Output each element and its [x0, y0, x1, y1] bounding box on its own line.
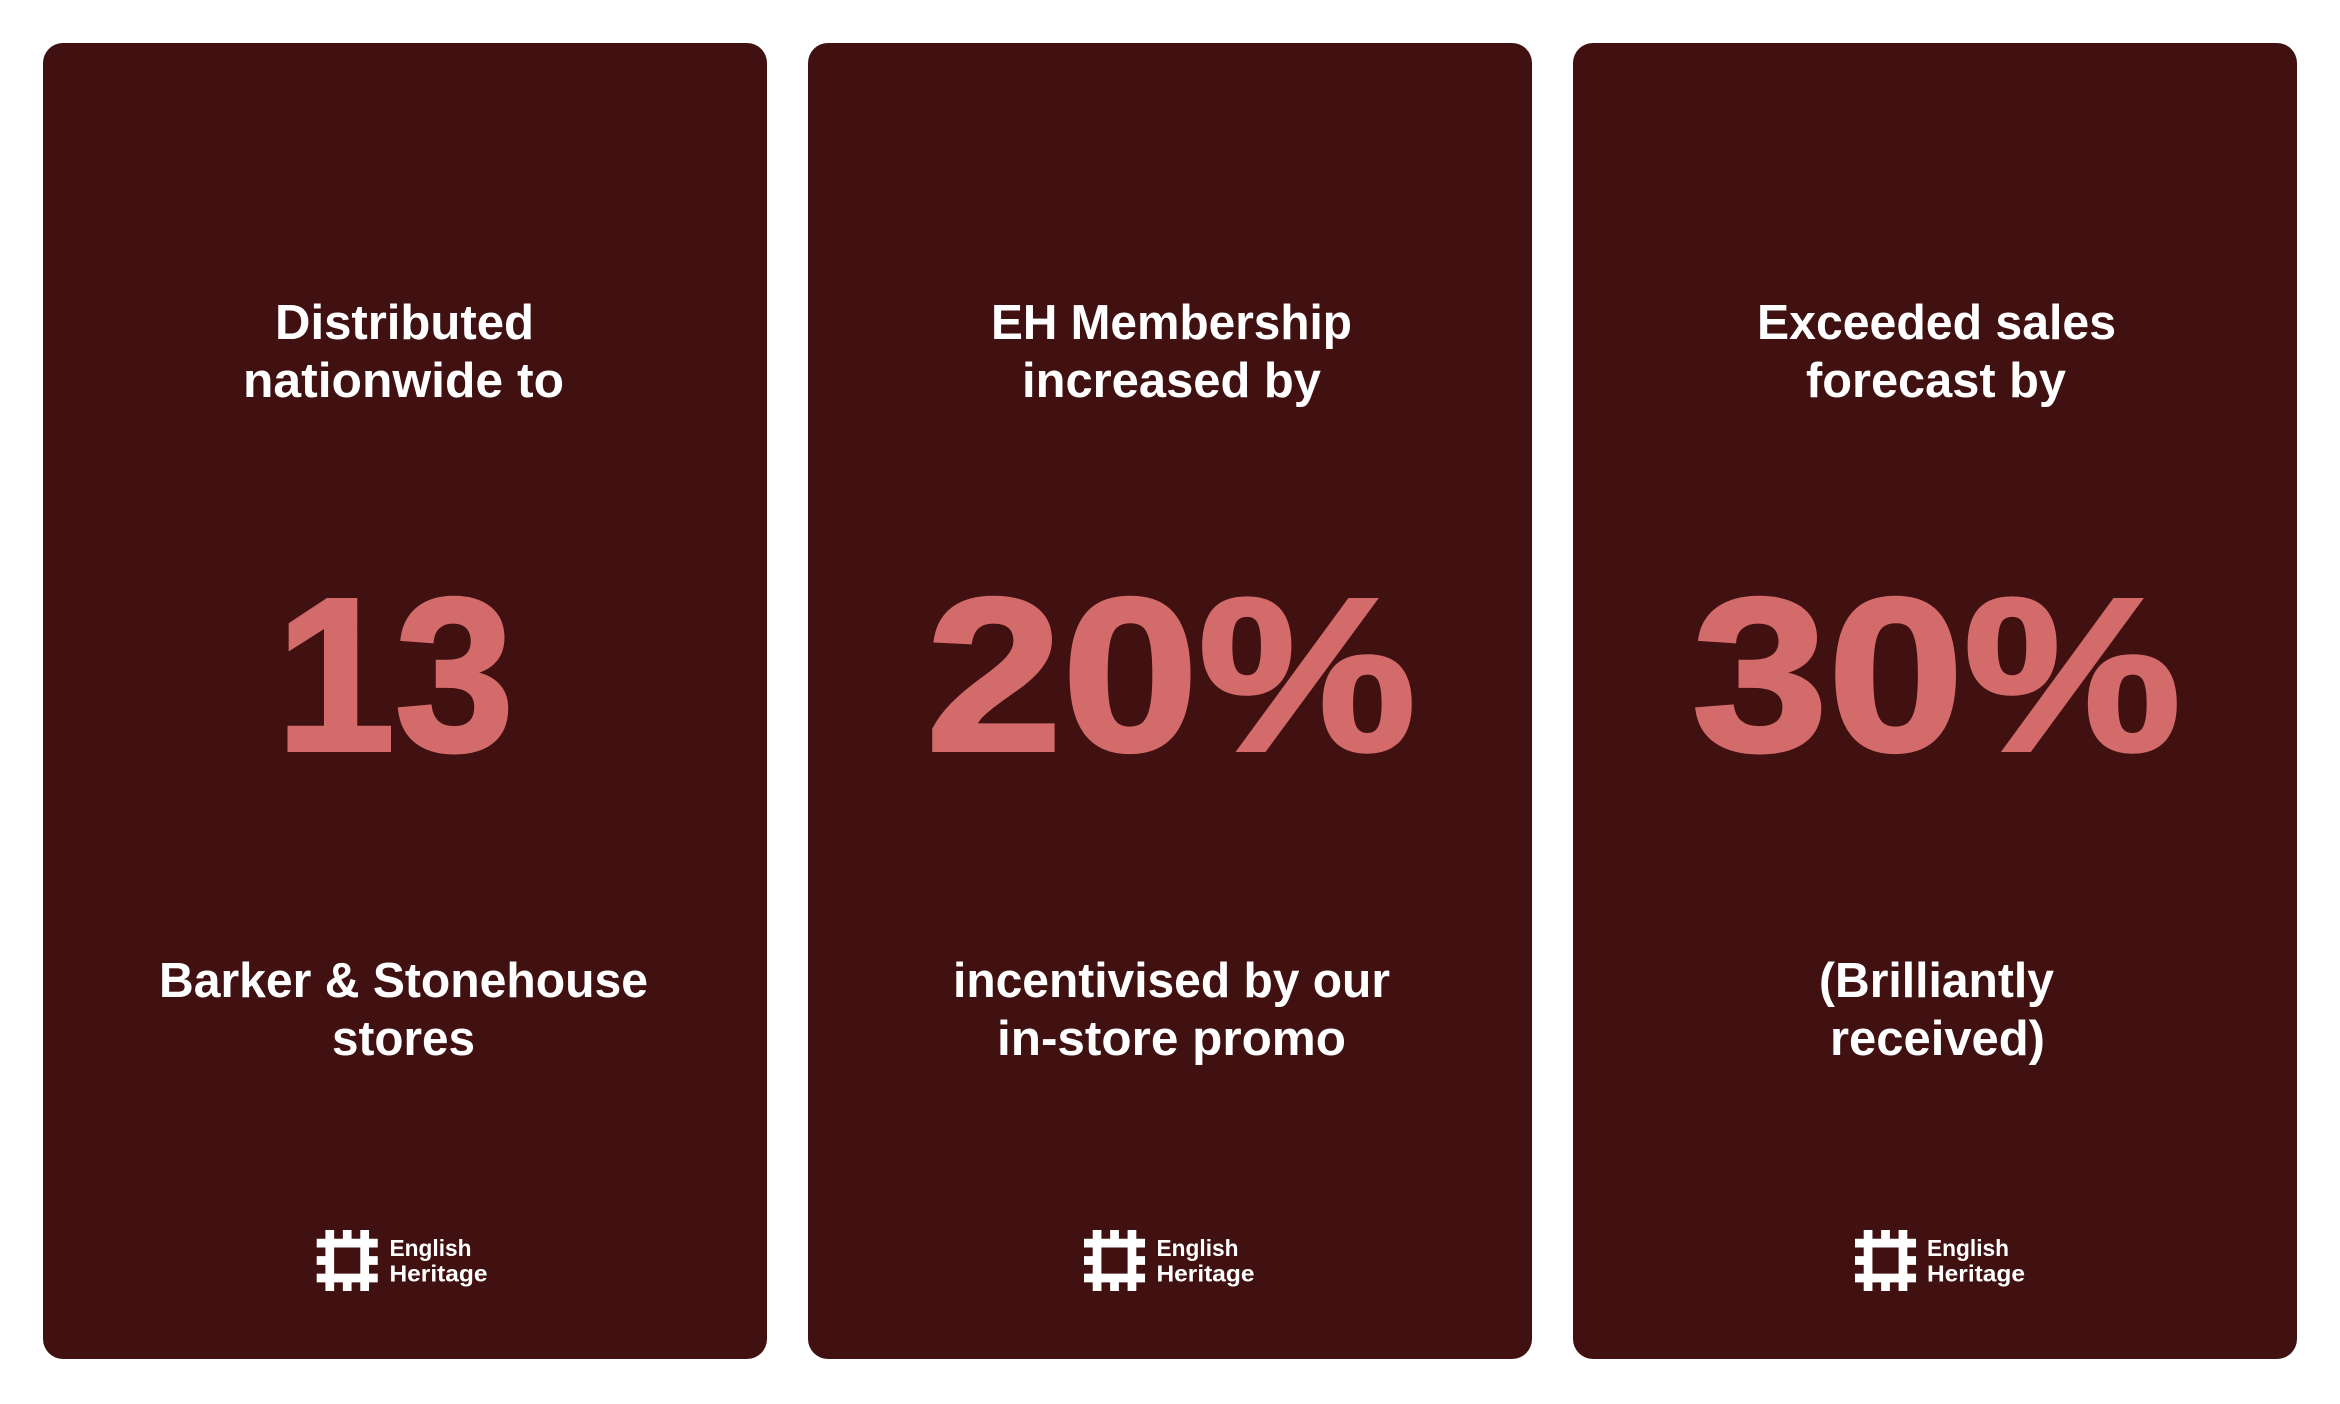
- icon: castle keep: [1855, 1230, 1916, 1291]
- heading: exceeded sales forecast by: [1757, 296, 2116, 408]
- heading: exceeded sales forecast by: Exceeded sales: [1757, 296, 2116, 350]
- caption: Barker and Stonehouse stores: Barker & Stonehouse: [159, 954, 648, 1008]
- heading: distributed nationwide to: nationwide to: [243, 354, 564, 408]
- caption: incentivised by our in-store promo: in-store promo: [997, 1012, 1346, 1066]
- wordmark: Heritage: [1156, 1260, 1254, 1286]
- caption: Barker and Stonehouse stores: [159, 954, 648, 1066]
- wordmark: English: [1927, 1235, 2009, 1261]
- panel: membership: [808, 43, 1532, 1359]
- big number: 30%: 30%: [1692, 554, 2181, 797]
- logo: English Heritage: [317, 1230, 488, 1291]
- wordmark: [390, 1235, 488, 1286]
- caption: Barker and Stonehouse stores: stores: [332, 1012, 475, 1066]
- panel: sales: [1573, 43, 2297, 1359]
- heading: EH Membership increased by: EH Membership: [991, 296, 1352, 350]
- heading: distributed nationwide to: Distributed: [275, 296, 534, 350]
- wordmark: [1156, 1235, 1254, 1286]
- caption: brilliantly received: received): [1830, 1012, 2045, 1066]
- heading: EH Membership increased by: [991, 296, 1352, 408]
- caption: incentivised by our in-store promo: incentivised by our: [953, 954, 1390, 1008]
- icon: castle keep: [317, 1230, 378, 1291]
- logo: English Heritage: [1855, 1230, 2025, 1291]
- wordmark: Heritage: [1927, 1260, 2025, 1286]
- caption: brilliantly received: [1819, 954, 2054, 1066]
- heading: distributed nationwide to: [243, 296, 564, 408]
- wordmark: [1927, 1235, 2025, 1286]
- heading: exceeded sales forecast by: forecast by: [1806, 354, 2066, 408]
- wordmark: Heritage: [390, 1260, 488, 1286]
- panel: stores: [43, 43, 767, 1359]
- caption: incentivised by our in-store promo: [953, 954, 1390, 1066]
- big number: 20%: 20%: [926, 554, 1416, 797]
- logo: English Heritage: [1084, 1230, 1254, 1291]
- wordmark: English: [1156, 1235, 1238, 1261]
- big number: 13: 13: [276, 554, 514, 797]
- wordmark: English: [390, 1235, 472, 1261]
- caption: brilliantly received: (Brilliantly: [1819, 954, 2054, 1008]
- icon: castle keep: [1084, 1230, 1145, 1291]
- heading: EH Membership increased by: increased by: [1022, 354, 1321, 408]
